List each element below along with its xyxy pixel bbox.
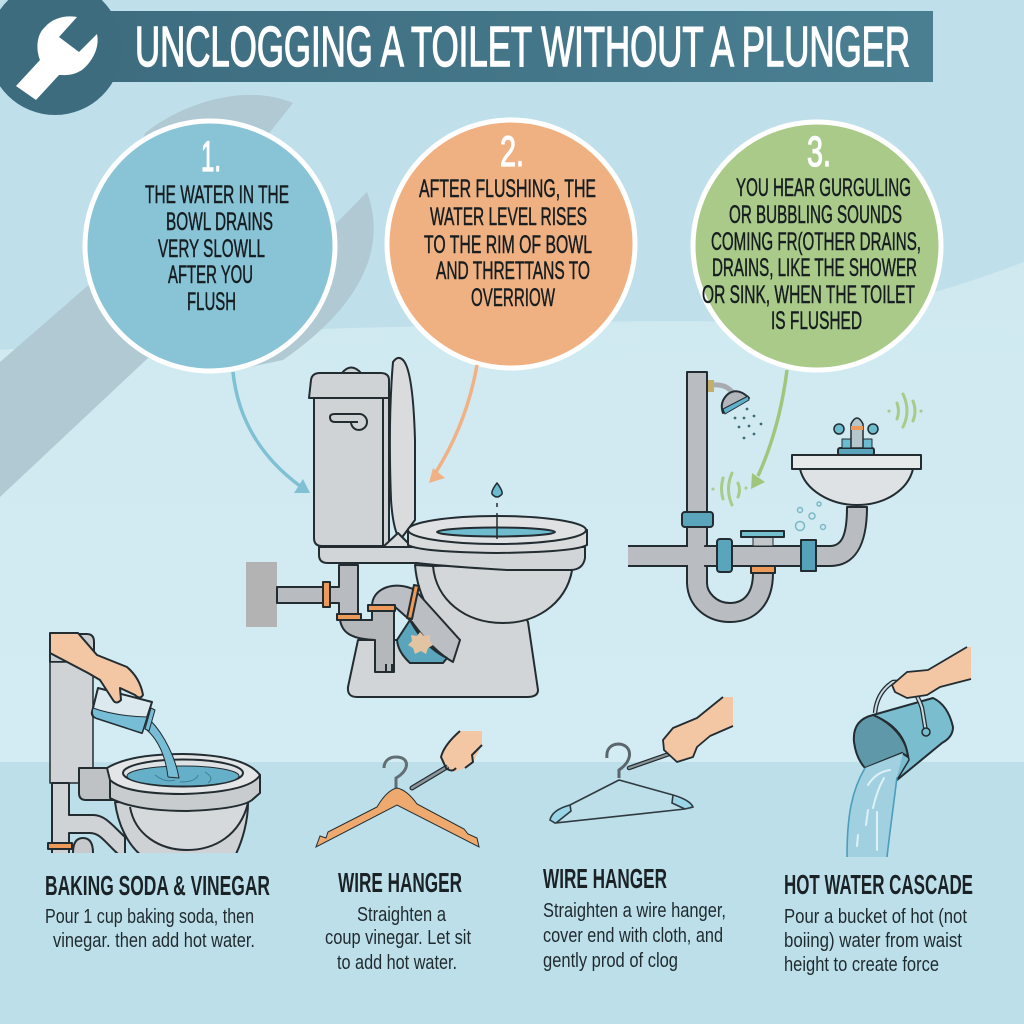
seat <box>107 754 260 794</box>
pedestal <box>348 565 538 697</box>
wall stub <box>246 562 277 627</box>
panel: symptom 3: 3. <box>807 128 831 176</box>
bowl <box>433 563 573 623</box>
panel: symptom 2 <box>387 120 635 368</box>
solution 3 text: gently prod of clog <box>543 950 678 972</box>
bucket body <box>873 698 953 780</box>
shower head <box>708 380 714 392</box>
panel: symptom 1: 1. <box>201 133 221 181</box>
glass <box>92 688 152 733</box>
hand <box>50 633 143 702</box>
panel: symptom 2: AND THRETTANS TO <box>436 257 590 285</box>
water cascade <box>847 753 903 857</box>
panel: symptom 2: WATER LEVEL RISES <box>430 203 587 231</box>
panel: symptom 1: FLUSH <box>187 288 236 316</box>
solution illustration: wooden hanger <box>316 731 482 847</box>
arrow: symptom 2 to bowl <box>429 365 477 483</box>
arrow: symptom 3 to pipes <box>751 370 787 489</box>
clog blob <box>408 632 433 654</box>
panel: symptom 1: VERY SLOWLL <box>158 235 265 263</box>
solution illustration: wire hanger <box>550 697 733 823</box>
tank <box>314 398 389 546</box>
panel: symptom 1: BOWL DRAINS <box>166 208 273 236</box>
panel: symptom 3: OR BUBBLING SOUNDS <box>729 201 902 229</box>
water drop <box>492 483 502 497</box>
bowl <box>115 802 248 856</box>
solution 4 text: boiing) water from waist <box>784 930 962 952</box>
outlet trap <box>340 611 394 672</box>
panel: symptom 3 <box>693 122 941 370</box>
toilet illustration <box>246 358 587 697</box>
panel: symptom 3: YOU HEAR GURGULING <box>736 174 911 202</box>
panel: symptom 2: TO THE RIM OF BOWL <box>424 231 592 259</box>
clog <box>397 620 447 663</box>
bubbles <box>796 502 826 530</box>
solution 1 text: BAKING SODA & VINEGAR <box>45 870 270 901</box>
solution 1 text: Pour 1 cup baking soda, then <box>45 906 254 928</box>
solution illustration: bucket pour <box>847 647 971 857</box>
solution 2 text: to add hot water. <box>337 952 457 974</box>
hand <box>892 647 971 698</box>
solution 2 text: Straighten a <box>357 904 447 926</box>
seat lip <box>110 775 260 811</box>
solution 2 text: WIRE HANGER <box>338 867 462 898</box>
solution 1 text <box>45 870 270 952</box>
handle <box>875 682 926 732</box>
solution 3 text: WIRE HANGER <box>543 863 667 894</box>
tank lid <box>309 373 389 398</box>
icon: wrench badge <box>0 0 122 115</box>
panel: symptom 1 <box>85 121 335 371</box>
solution illustration: baking soda pour <box>48 633 260 860</box>
water droplets <box>734 408 762 439</box>
seat <box>408 530 587 553</box>
deck <box>79 768 116 800</box>
solution 3 text: cover end with cloth, and <box>543 925 723 947</box>
supply pipes <box>277 565 358 614</box>
solution 1 text: vinegar. then add hot water. <box>53 930 255 952</box>
arrow: symptom 1 to tank <box>233 372 310 493</box>
solution 4 text: height to create force <box>784 954 939 976</box>
solution 2 text: coup vinegar. Let sit <box>325 927 471 949</box>
pouring stream <box>147 720 179 778</box>
horizontal pipe right <box>705 507 867 566</box>
collars <box>682 512 713 527</box>
water surface <box>437 528 555 536</box>
panel: symptom 2: OVERRIOW <box>471 284 555 312</box>
solution 3 text: Straighten a wire hanger, <box>543 900 726 922</box>
panel: symptom 2: 2. <box>500 128 524 176</box>
title banner <box>75 11 933 82</box>
tank lid knob <box>342 368 361 373</box>
panel: symptom 1: THE WATER IN THE <box>145 181 289 209</box>
panel: symptom 3: IS FLUSHED <box>771 307 862 335</box>
plumbing illustration <box>628 372 921 622</box>
vertical pipe and p-trap <box>687 372 773 622</box>
sink basin <box>800 469 913 505</box>
pipes <box>52 783 125 860</box>
raised lid <box>390 358 415 540</box>
background wrench silhouette <box>0 95 374 497</box>
bowl water <box>127 766 239 786</box>
horizontal pipe left <box>628 546 689 566</box>
flush handle <box>330 414 367 430</box>
solution 4 text <box>784 869 973 976</box>
panel: symptom 1: AFTER YOU <box>168 261 253 289</box>
faucet <box>834 418 878 455</box>
bucket opening <box>854 715 908 768</box>
sound waves <box>713 394 921 505</box>
solution 2 text <box>325 867 471 974</box>
solution 3 text <box>543 863 726 972</box>
deck <box>319 547 585 570</box>
panel: symptom 2: AFTER FLUSHING, THE <box>419 175 596 203</box>
solution 4 text: Pour a bucket of hot (not <box>784 906 967 928</box>
